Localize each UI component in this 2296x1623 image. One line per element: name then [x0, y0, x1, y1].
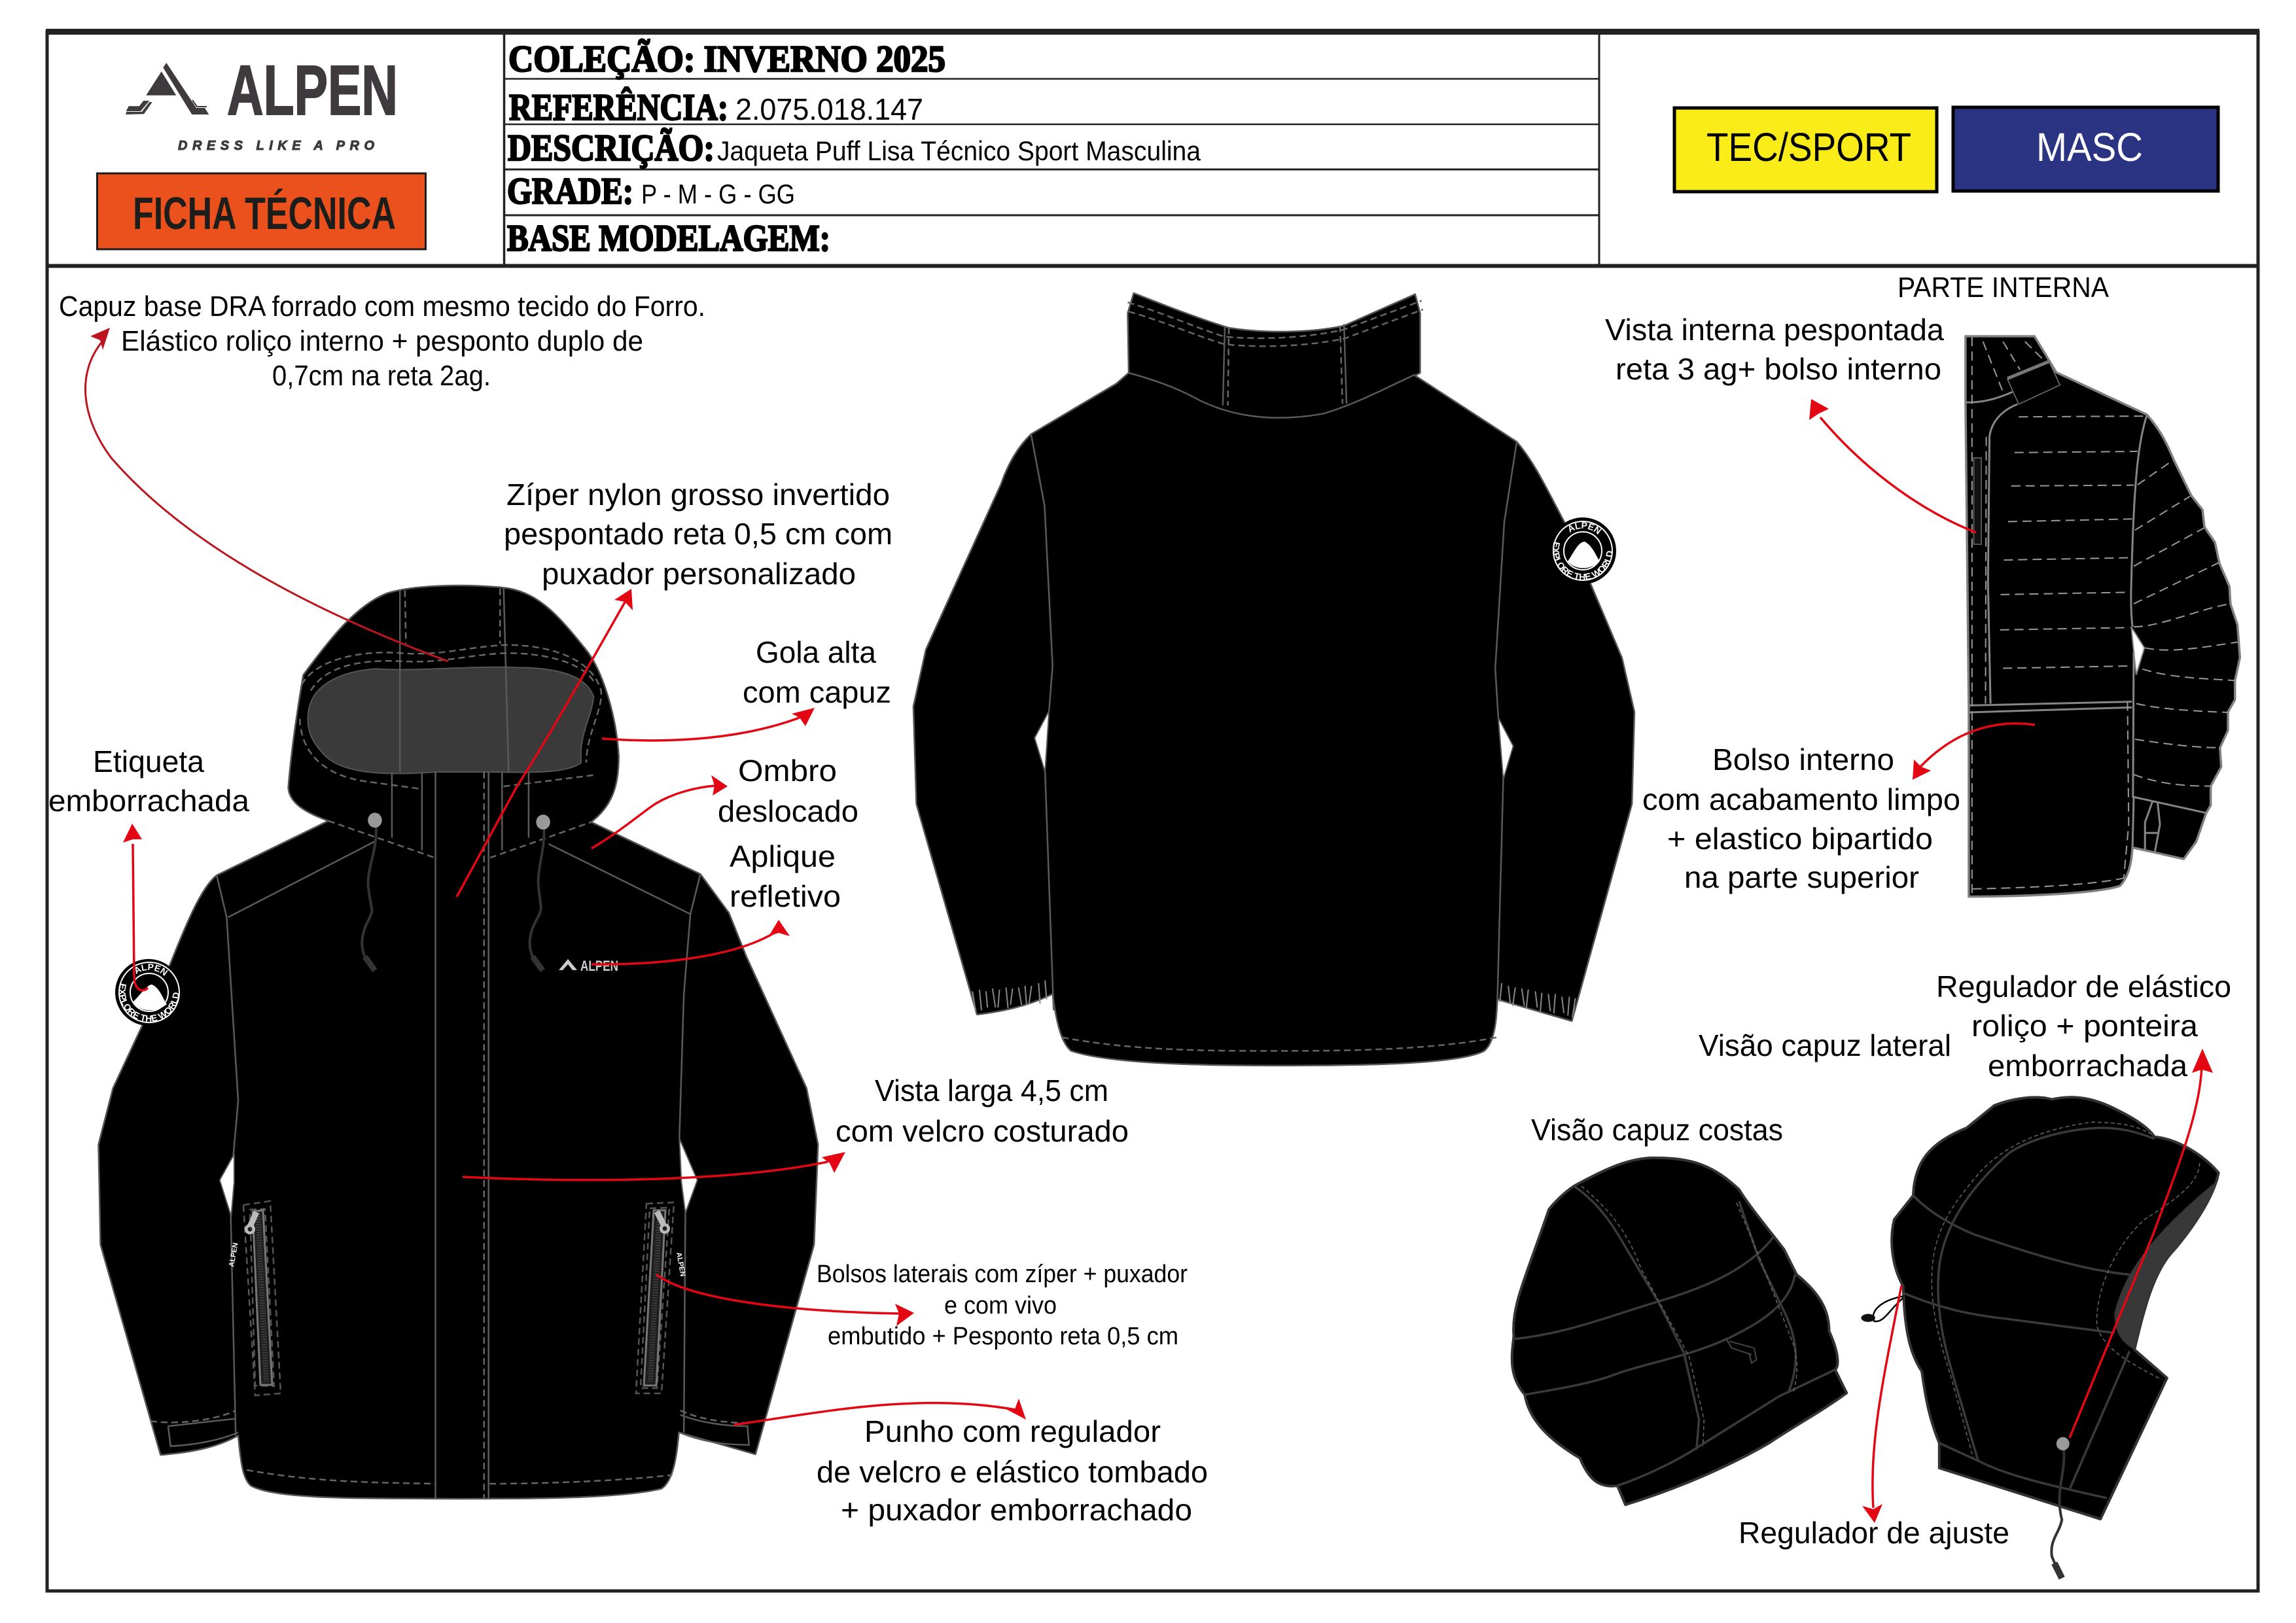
logo wordmark: ALPEN [227, 50, 398, 130]
hood back seams [1515, 1186, 1835, 1486]
arrow: inner pocket [1913, 724, 2035, 780]
note: inner pocket: + elastico bipartido [1667, 822, 1933, 856]
front jacket [99, 585, 818, 1499]
info table lines [504, 33, 1599, 266]
back jacket [913, 293, 1634, 1066]
tag: masc [1953, 107, 2218, 191]
hood lining [308, 667, 593, 774]
note: side pockets: embutido + Pesponto reta 0,5 cm [828, 1323, 1178, 1350]
arrow: collar [602, 708, 815, 741]
tag: tec/sport: TEC/SPORT [1706, 125, 1911, 169]
rubber patch: front: ALPEN [135, 964, 168, 976]
arrow: zipper [457, 589, 633, 897]
arrow: adjustment regulator [1862, 1285, 1901, 1523]
note: cuff: Punho com regulador [864, 1414, 1161, 1448]
note: inner facing: reta 3 ag+ bolso interno [1616, 352, 1941, 386]
reflective logo [559, 958, 618, 974]
hood side seams [1903, 1122, 2200, 1498]
arrow: side pockets [656, 1274, 914, 1326]
rubber patch: back: EXPLORE THE WORLD [1553, 542, 1612, 580]
note: reflective [730, 839, 841, 913]
note: inner pocket: Bolso interno [1712, 742, 1894, 777]
note: zipper: puxador personalizado [542, 557, 856, 591]
descrição row [508, 128, 1201, 169]
armpit gap [2131, 627, 2144, 674]
note: rubber label: emborrachada [48, 784, 249, 818]
hood back silhouette [1512, 1158, 1846, 1505]
hood side view [1861, 1097, 2219, 1578]
drawcord [1861, 1297, 2070, 1578]
left pocket: ALPEN [228, 1242, 239, 1268]
seams [972, 301, 1576, 1051]
inner silhouette [1966, 336, 2240, 897]
referência row [509, 87, 923, 128]
armpit gaps [1034, 711, 1513, 780]
label: side hood view: Visão capuz lateral [1699, 1028, 1951, 1062]
referência row: REFERÊNCIA: [509, 87, 728, 128]
logo tagline: DRESS LIKE A PRO [178, 139, 374, 153]
note: cuff: + puxador emborrachado [841, 1493, 1192, 1527]
note: elastic regulator [1936, 969, 2231, 1083]
rubber patch: front: EXPLORE THE WORLD [120, 984, 179, 1022]
note: inner facing: Vista interna pespontada [1605, 313, 1944, 347]
ficha técnica badge: FICHA TÉCNICA [133, 188, 396, 239]
hood back view [1512, 1158, 1846, 1505]
note: placket: com velcro costurado [836, 1114, 1129, 1148]
arrow: hood [85, 328, 448, 661]
note: placket: Vista larga 4,5 cm [875, 1073, 1108, 1108]
arrow: placket [463, 1152, 845, 1180]
base modelagem row: BASE MODELAGEM: [507, 218, 830, 259]
seams [150, 587, 749, 1498]
rubber patch: back: ALPEN [1569, 522, 1602, 534]
heading: parte interna: PARTE INTERNA [1898, 271, 2110, 304]
hood lining [2115, 1174, 2219, 1350]
arrow: cuff [734, 1399, 1026, 1425]
hood side silhouette [1892, 1097, 2219, 1519]
note: hood [59, 290, 705, 392]
note: elastic regulator: Regulador de elástico [1936, 969, 2231, 1003]
arrow: inner facing [1809, 399, 1976, 532]
descrição row: DESCRIÇÃO: [508, 128, 715, 169]
note: shoulder: deslocado [718, 794, 858, 828]
header [97, 33, 2218, 266]
arrow: rubber label [123, 824, 148, 990]
drawcords [362, 812, 550, 970]
note: hood: 0,7cm na reta 2ag. [272, 360, 491, 392]
grade row [507, 171, 795, 212]
referência row: 2.075.018.147 [735, 92, 923, 126]
tag: masc: MASC [2036, 125, 2143, 169]
left pocket [228, 1201, 281, 1395]
note: side pockets: e com vivo [944, 1292, 1057, 1319]
arrow: shoulder [592, 775, 728, 848]
note: inner pocket: na parte superior [1684, 860, 1919, 894]
note: collar: com capuz [743, 675, 891, 709]
right pocket: ALPEN [675, 1251, 686, 1277]
note: shoulder [718, 754, 858, 828]
arrow: elastic regulator [2070, 1049, 2213, 1438]
note: side pockets: Bolsos laterais com zíper + puxador [817, 1261, 1188, 1288]
note: reflective: refletivo [730, 879, 841, 913]
logo [126, 50, 398, 153]
back silhouette [913, 293, 1634, 1066]
note: zipper [504, 478, 892, 591]
note: inner pocket: com acabamento limpo [1642, 782, 1960, 816]
tag: tec/sport [1674, 108, 1937, 192]
note: collar: Gola alta [756, 635, 876, 669]
note: rubber label: Etiqueta [93, 744, 204, 778]
inner view jacket [1966, 336, 2240, 897]
logo mark [126, 63, 209, 114]
note: side pockets [817, 1261, 1188, 1350]
note: inner pocket [1642, 742, 1960, 894]
note: elastic regulator: roliço + ponteira [1971, 1009, 2198, 1043]
note: reflective: Aplique [730, 839, 836, 873]
rubber patch: back [1553, 517, 1616, 584]
grade row: P - M - G - GG [641, 179, 795, 209]
note: shoulder: Ombro [738, 754, 837, 788]
note: elastic regulator: emborrachada [1988, 1049, 2187, 1083]
note: zipper: Zíper nylon grosso invertido [506, 478, 890, 512]
label: adjustment regulator: Regulador de ajuste [1739, 1516, 2009, 1550]
note: cuff: de velcro e elástico tombado [817, 1455, 1208, 1489]
inner seams [1966, 337, 2238, 894]
right pocket [636, 1202, 686, 1393]
grade row: GRADE: [507, 171, 633, 212]
coleção row: COLEÇÃO: INVERNO 2025 [508, 39, 945, 80]
rubber patch: front [115, 959, 180, 1026]
note: hood: Elástico roliço interno + pesponto duplo de [121, 325, 643, 357]
note: zipper: pespontado reta 0,5 cm com [504, 517, 892, 551]
note: collar [743, 635, 891, 709]
label: back hood view: Visão capuz costas [1531, 1113, 1783, 1147]
note: cuff [817, 1414, 1208, 1527]
ficha técnica badge [97, 173, 425, 249]
note: inner facing [1605, 313, 1944, 386]
front silhouette [99, 585, 818, 1499]
note: placket [836, 1073, 1129, 1148]
armpit gaps [220, 1138, 698, 1217]
note: hood: Capuz base DRA forrado com mesmo tecido do Forro. [59, 290, 705, 323]
reflective logo: ALPEN [580, 958, 618, 974]
arrow: reflective logo [592, 920, 790, 964]
note: rubber label [48, 744, 249, 818]
descrição row: Jaqueta Puff Lisa Técnico Sport Masculina [717, 135, 1201, 166]
